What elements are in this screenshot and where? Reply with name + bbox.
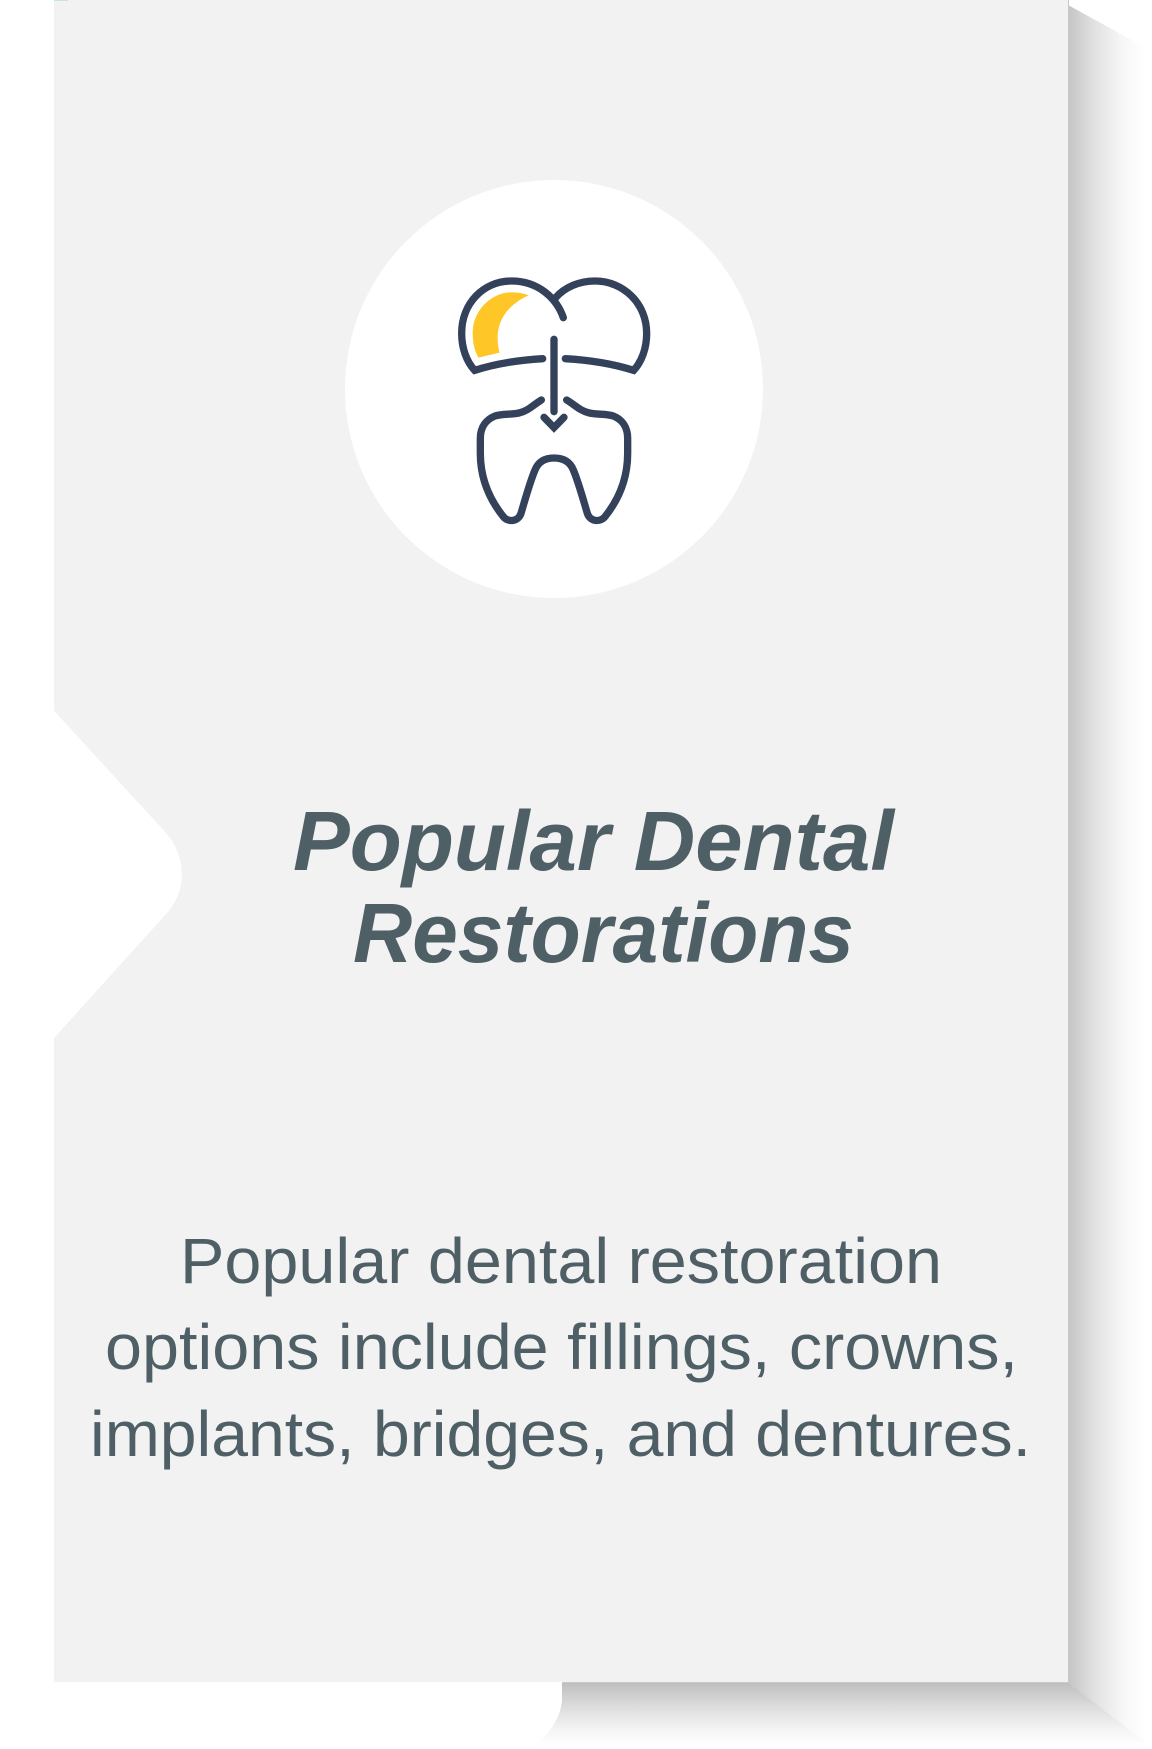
body text [90, 1225, 1031, 1470]
icon background circle [345, 180, 763, 598]
body text: implants, bridges, and dentures. [90, 1398, 1031, 1470]
panel drop shadow [530, 5, 1150, 1746]
icon: dental crown placed over tooth [345, 180, 763, 598]
body text: Popular dental restoration [180, 1225, 942, 1297]
white chevron notch on left edge [54, 711, 182, 1038]
title: Popular Dental [293, 794, 896, 888]
body text: options include fillings, crowns, [105, 1311, 1018, 1383]
title: Restorations [353, 886, 854, 980]
title [293, 794, 896, 980]
tooth and crown glyph [462, 281, 647, 520]
white notch tab at bottom of card [54, 1682, 562, 1749]
